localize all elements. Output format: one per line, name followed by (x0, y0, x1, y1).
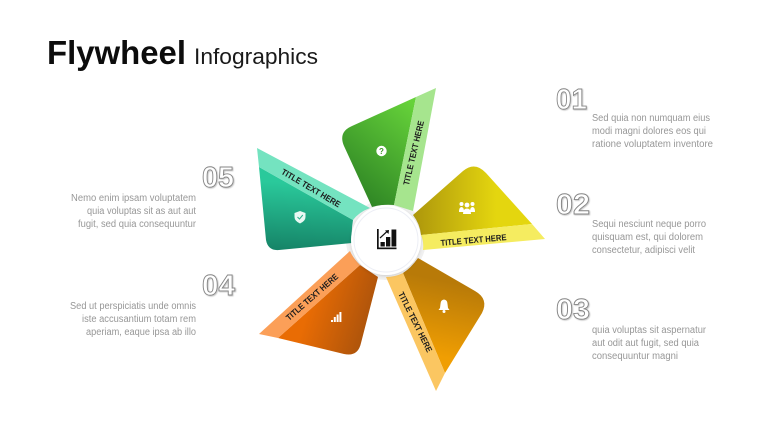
number 03: 03 (556, 294, 590, 326)
number 02: 02 (556, 189, 590, 221)
text 03: consequuntur magni (592, 351, 678, 362)
text 05 (71, 193, 197, 230)
blade 05: teal (257, 148, 370, 250)
text 01: ratione voluptatem inventore (592, 139, 714, 150)
item 05 (71, 162, 234, 230)
number 04: 04 (202, 270, 235, 302)
title (47, 35, 318, 72)
number 01: 01 (556, 84, 587, 116)
text 04: Sed ut perspiciatis unde omnis (70, 301, 196, 312)
icon: question: ? (379, 147, 384, 156)
blade 02: yellow (413, 166, 545, 250)
item 04 (70, 270, 235, 338)
text 01: modi magni dolores eos qui (592, 126, 706, 137)
item 02 (556, 189, 707, 256)
number 05: 05 (202, 162, 234, 194)
label: title text 04: TITLE TEXT HERE (284, 271, 340, 322)
label: title text 03: TITLE TEXT HERE (396, 290, 435, 354)
item 01 (556, 84, 714, 150)
text 03 (592, 325, 707, 362)
text 02: quisquam est, qui dolorem (592, 232, 703, 243)
label: title text 01: TITLE TEXT HERE (401, 120, 426, 186)
text 05: Nemo enim ipsam voluptatem (71, 193, 196, 204)
text 04: iste accusantium totam rem (82, 314, 196, 325)
text 03: aut odit aut fugit, sed quia (592, 338, 700, 349)
text 04 (70, 301, 197, 338)
title: Flywheel (47, 35, 186, 72)
center hub (351, 205, 421, 275)
text 01: Sed quia non numquam eius (592, 113, 710, 124)
label: title text 02: TITLE TEXT HERE (440, 232, 507, 248)
blade 03: gold (386, 258, 484, 391)
text 05: fugit, sed quia consequuntur (78, 219, 197, 230)
blade 01: green (342, 88, 436, 211)
icon: people (459, 202, 475, 214)
title: Infographics (194, 44, 318, 69)
icon: shield (294, 211, 306, 224)
text 01 (592, 113, 714, 150)
icon: signal bars (331, 312, 341, 322)
text 05: quia voluptas sit as aut aut (87, 206, 196, 217)
icon: bar chart (377, 229, 396, 249)
text 02 (592, 219, 707, 256)
item 03 (556, 294, 707, 362)
text 02: Sequi nesciunt neque porro (592, 219, 707, 230)
text 04: aperiam, eaque ipsa ab illo (86, 327, 197, 338)
icon: bell (438, 300, 450, 313)
text 02: consectetur, adipisci velit (592, 245, 695, 256)
blade 04: orange (259, 251, 378, 355)
text 03: quia voluptas sit aspernatur (592, 325, 707, 336)
hub back ring (346, 200, 426, 280)
label: title text 05: TITLE TEXT HERE (280, 167, 343, 210)
